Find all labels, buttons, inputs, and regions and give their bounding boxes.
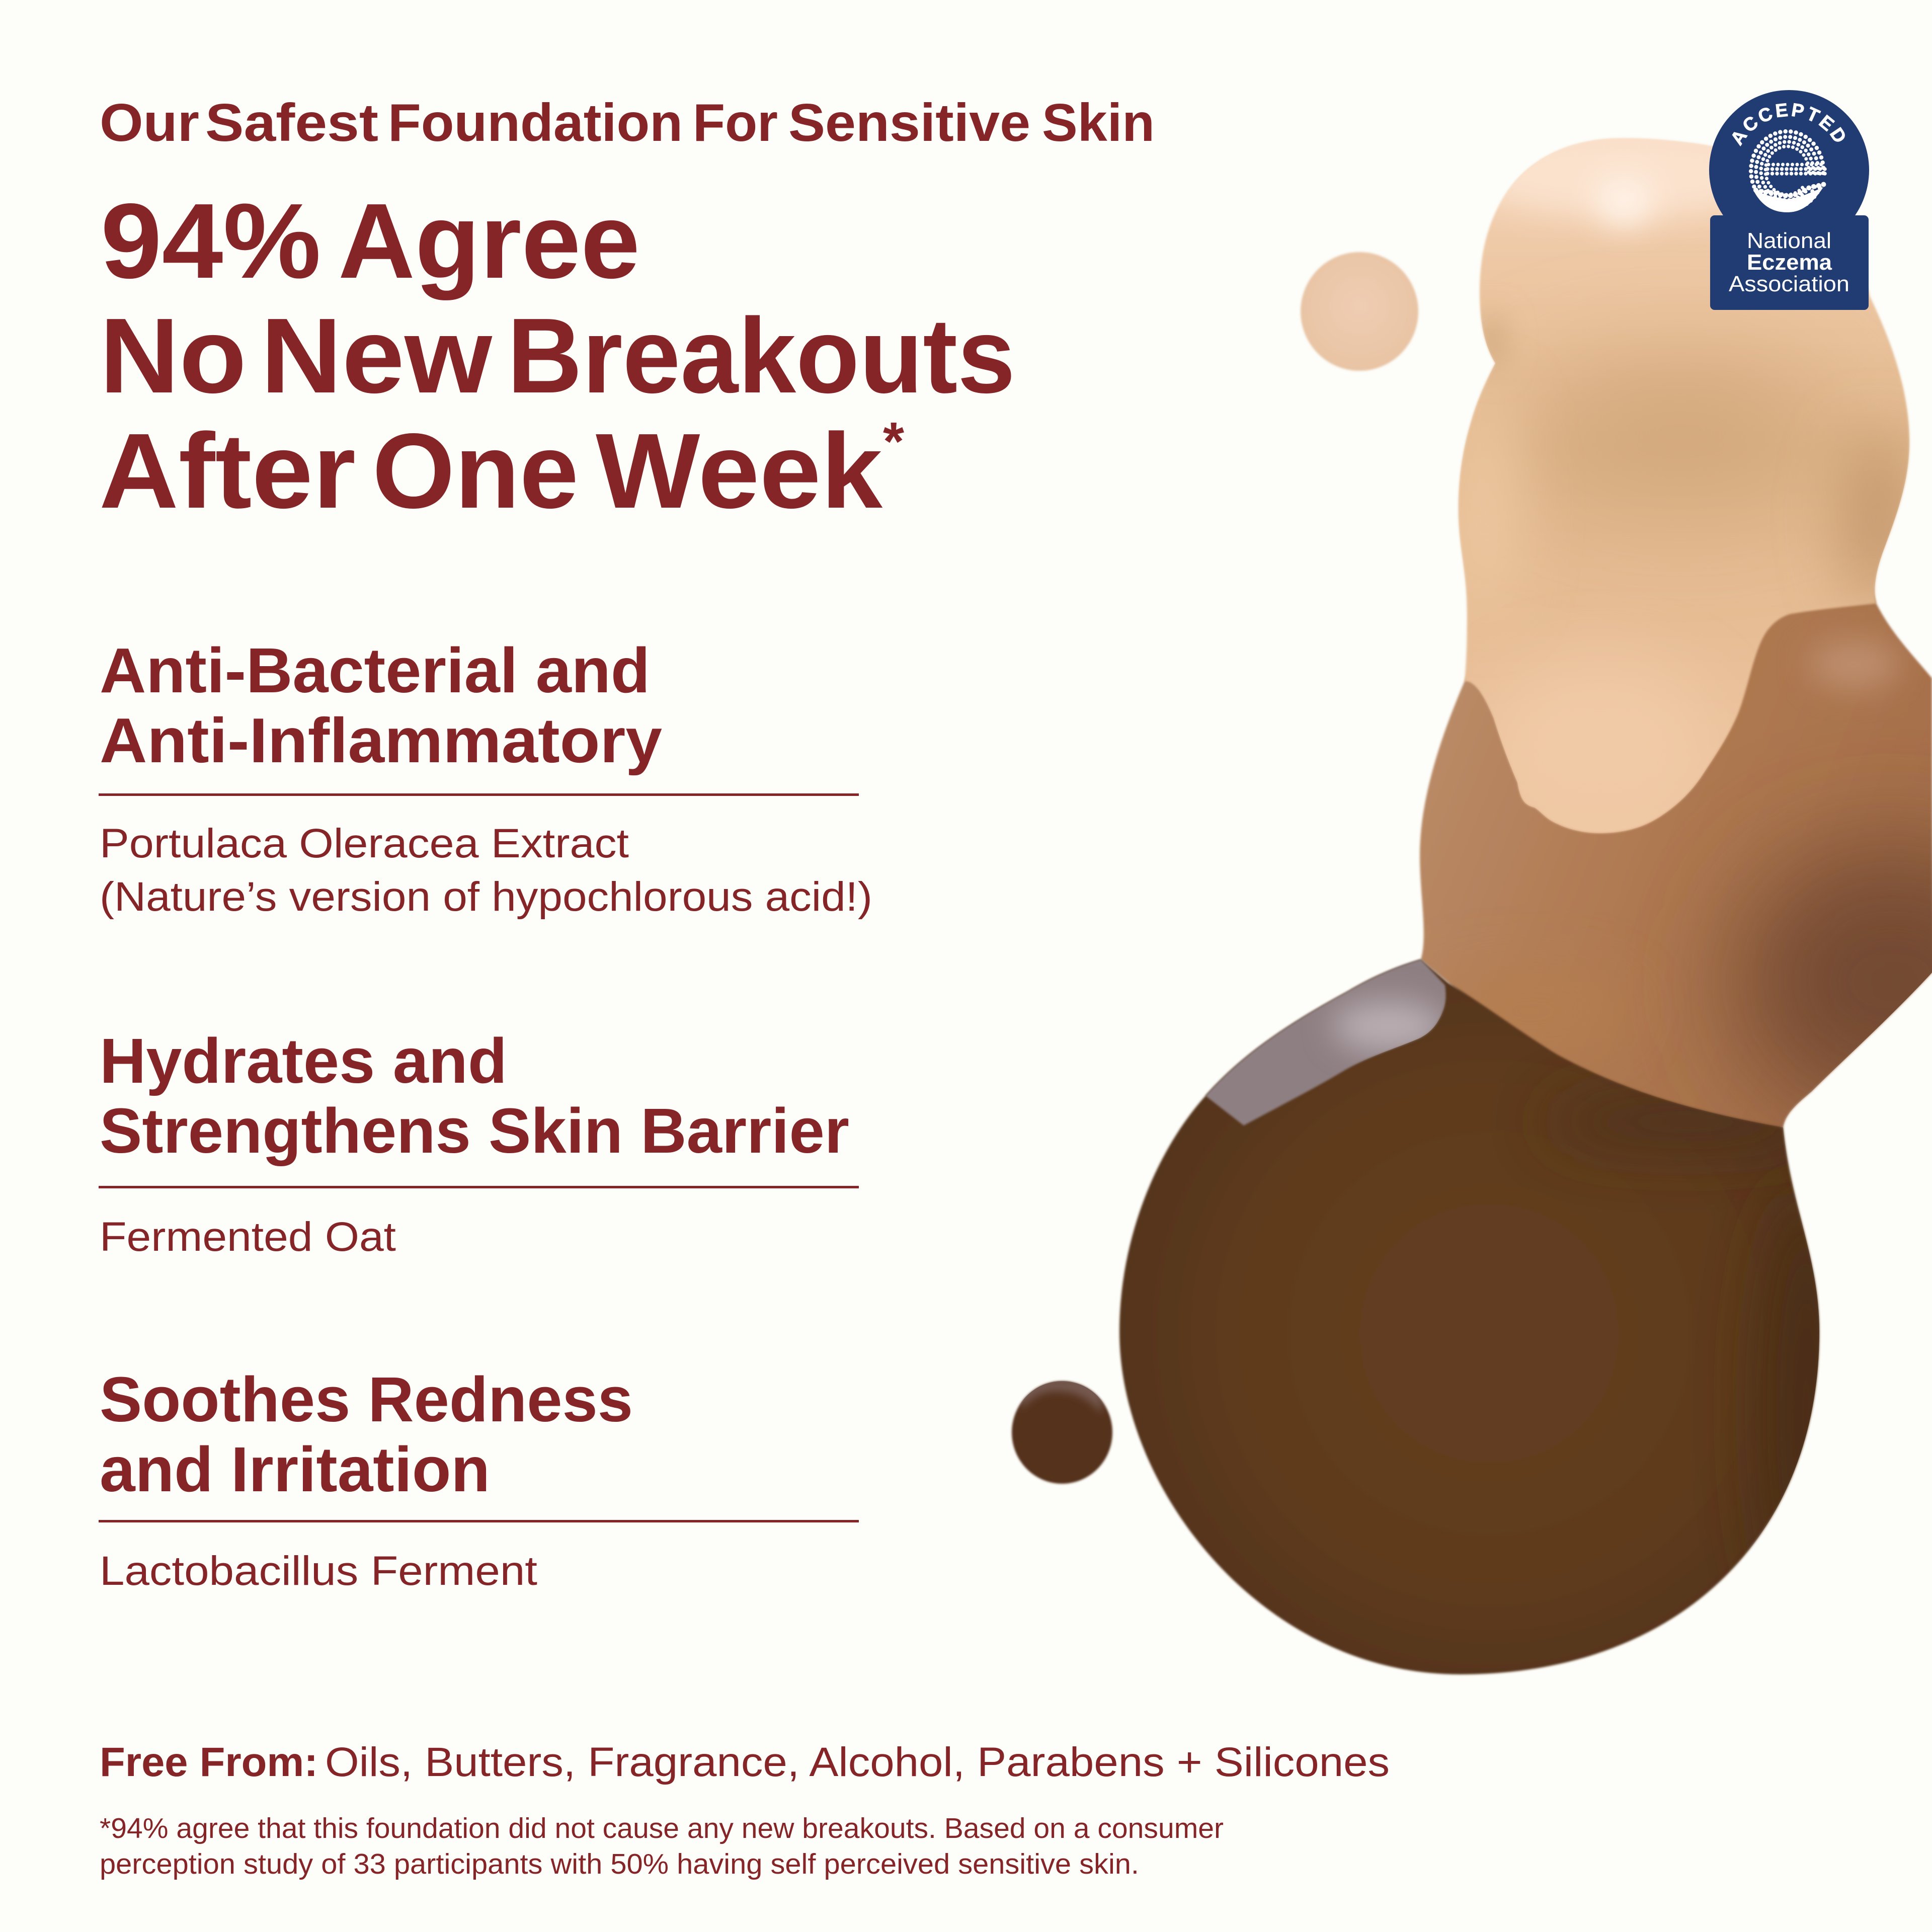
badge: National Eczema Association accepted seal: [1709, 90, 1869, 310]
badge text: Association: Association: [1729, 272, 1849, 296]
free-from line: [100, 1739, 1390, 1785]
headline line 3: After: [99, 411, 356, 530]
product swatch: medium shade foundation: [1418, 595, 1932, 1129]
headline line 1: 94%: [101, 181, 321, 300]
benefit heading: Soothes Redness: [100, 1364, 633, 1435]
droplet: light shade: [1301, 252, 1418, 371]
headline line 2: [100, 296, 1015, 415]
eyebrow heading: Skin: [1042, 93, 1155, 152]
benefit heading: Hydrates and: [100, 1025, 507, 1096]
free-from label: Free From:: [100, 1739, 318, 1785]
droplet: deep shade: [1012, 1379, 1112, 1484]
ingredient text: Fermented Oat: [100, 1214, 396, 1260]
product swatch: light shade foundation: [1454, 131, 1912, 833]
glossy highlight on deep shade: [1205, 959, 1446, 1125]
headline line 3: Week: [596, 411, 883, 530]
benefit heading line 2: Strengthens Skin Barrier: [100, 1095, 849, 1166]
headline line 1: [101, 181, 640, 300]
footnote line 1: *94% agree that this foundation did not cause any new breakouts. Based on a consumer: [100, 1812, 1224, 1844]
benefit 1: anti-bacterial: [99, 635, 872, 920]
badge icon: dotted letter e: [1751, 131, 1826, 212]
headline line 2: Breakouts: [507, 296, 1015, 415]
free-from list: Oils, Butters, Fragrance, Alcohol, Parabens + Silicones: [325, 1739, 1390, 1785]
eyebrow heading: Foundation: [388, 93, 683, 152]
ingredient text: Portulaca Oleracea Extract: [100, 821, 629, 866]
product swatch: deep shade foundation: [1119, 959, 1857, 1674]
headline line 3: [99, 411, 883, 530]
badge text: Eczema: Eczema: [1747, 250, 1832, 275]
badge text: National: National: [1747, 228, 1831, 253]
badge arc text: ACCEPTED: ACCEPTED: [1732, 103, 1845, 146]
eyebrow heading: Our: [100, 93, 199, 152]
footnote line 2: perception study of 33 participants with 50% having self perceived sensitive skin.: [100, 1848, 1139, 1880]
footnote: [100, 1812, 1224, 1880]
eyebrow heading: [100, 93, 1155, 152]
headline line 2: No: [100, 296, 247, 415]
headline line 2: New: [261, 296, 493, 415]
benefit heading line 2: Anti-Inflammatory: [100, 705, 662, 776]
ingredient note: (Nature’s version of hypochlorous acid!): [100, 874, 872, 920]
headline asterisk: *: [883, 411, 904, 471]
eyebrow heading: Sensitive: [788, 93, 1030, 152]
ingredient text: Lactobacillus Ferment: [100, 1548, 537, 1594]
headline line 3: One: [372, 411, 579, 530]
benefit 2: hydrates: [99, 1025, 859, 1260]
headline line 1: Agree: [338, 181, 640, 300]
benefit heading: Anti-Bacterial and: [100, 635, 650, 706]
eyebrow heading: For: [693, 93, 778, 152]
eyebrow heading: Safest: [205, 93, 378, 152]
benefit heading line 2: and Irritation: [100, 1434, 490, 1505]
main headline: [99, 181, 1015, 530]
benefit 3: soothes: [99, 1364, 859, 1594]
